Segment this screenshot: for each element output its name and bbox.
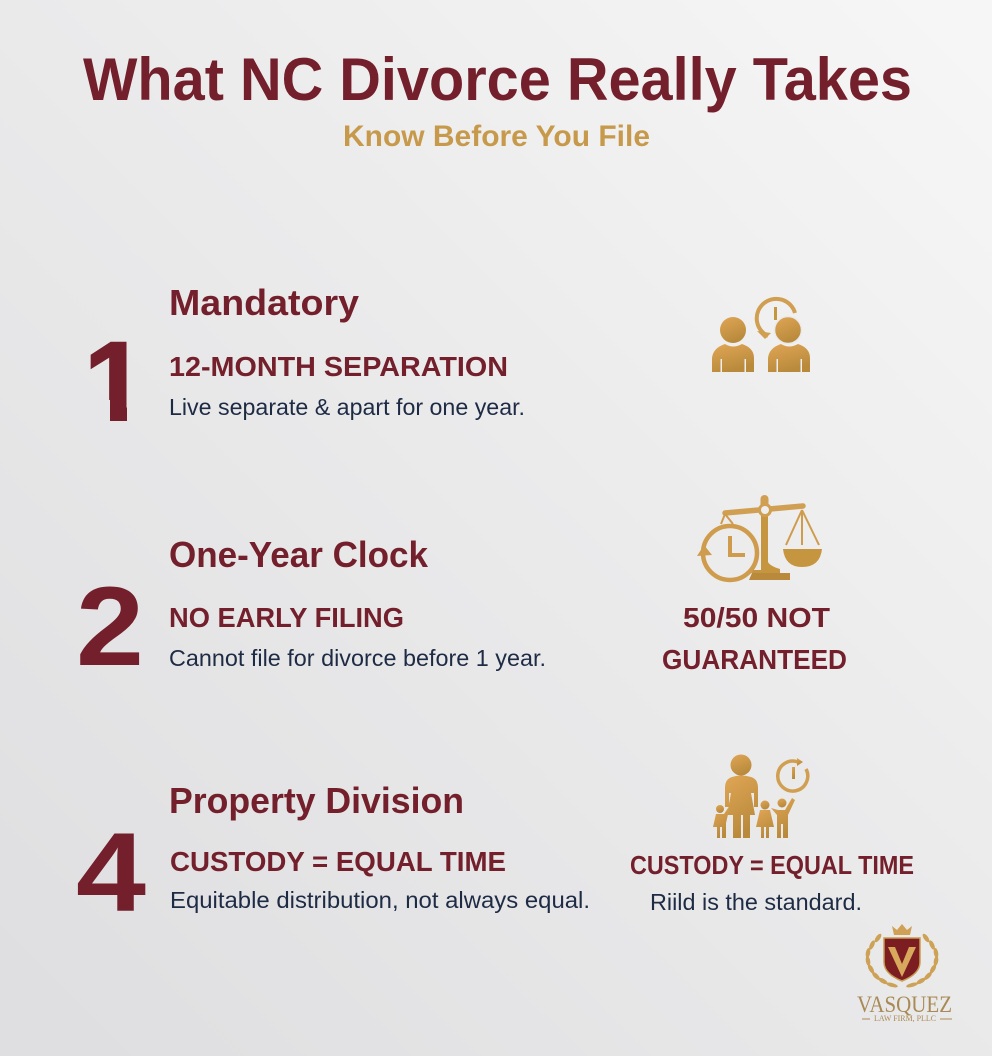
number 1: 1	[84, 319, 146, 444]
label: 50/50 not guaranteed	[662, 602, 847, 675]
number 2: 2	[76, 564, 144, 689]
label: 50/50 not guaranteed: 50/50 NOT	[683, 602, 830, 633]
wordmark: VASQUEZ	[857, 992, 952, 1017]
subheading: custody equal time: CUSTODY = EQUAL TIME	[170, 846, 506, 877]
heading: Mandatory: Mandatory	[169, 282, 359, 323]
item 4: property division	[76, 780, 590, 935]
number 4: 4	[76, 810, 146, 935]
heading: One-Year Clock: One-Year Clock	[169, 534, 429, 575]
heading: Property Division: Property Division	[169, 780, 464, 821]
description: Cannot file for divorce before 1 year.	[169, 645, 546, 671]
label: 50/50 not guaranteed: GUARANTEED	[662, 644, 847, 675]
subheading: 12-month separation: 12-MONTH SEPARATION	[169, 351, 508, 382]
description: standard: Riild is the standard.	[650, 889, 862, 915]
subtitle: Know Before You File	[343, 120, 650, 153]
crown	[892, 924, 912, 935]
label: custody equal time: CUSTODY = EQUAL TIME	[630, 850, 914, 880]
logo: Vasquez Law Firm	[857, 924, 952, 1023]
icon: scales with clock	[697, 495, 822, 580]
icon: two people with clock	[712, 299, 810, 372]
item 1: mandatory separation	[90, 288, 523, 421]
description: Equitable distribution, not always equal.	[170, 887, 590, 913]
icon: parent with children and clock	[713, 754, 808, 838]
title: What NC Divorce Really Takes	[83, 46, 912, 113]
tagline: LAW FIRM, PLLC	[874, 1014, 936, 1023]
laurel wreath	[865, 933, 939, 988]
shield	[884, 938, 920, 981]
subheading: no early filing: NO EARLY FILING	[169, 602, 404, 633]
description: Live separate & apart for one year.	[169, 394, 525, 420]
item 2: one-year clock	[76, 534, 546, 689]
